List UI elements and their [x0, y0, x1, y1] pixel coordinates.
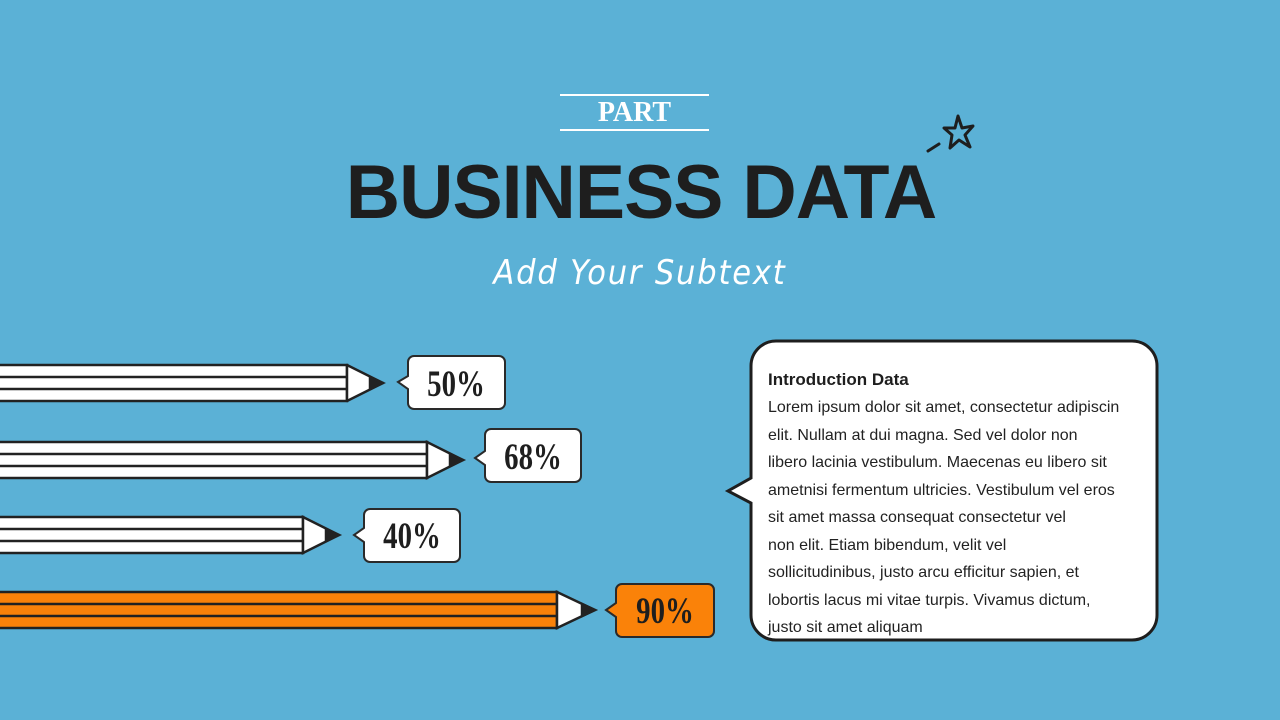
body text: justo sit amet aliquam [768, 619, 923, 636]
pencil 1: 50% [0, 365, 383, 401]
body text [768, 399, 1119, 636]
label: 50%: 50% [427, 364, 485, 405]
label: 90%: 90% [636, 591, 694, 632]
pencil 2: 68% [0, 442, 463, 478]
body text: sit amet massa consequat consectetur vel [768, 509, 1066, 526]
label: 40% [354, 509, 460, 562]
body text: libero lacinia vestibulum. Maecenas eu libero sit [768, 454, 1107, 471]
body text: ametnisi fermentum ultricies. Vestibulum vel eros [768, 482, 1115, 498]
body text: Lorem ipsum dolor sit amet, consectetur adipiscin [768, 399, 1119, 416]
label: 68%: 68% [504, 437, 562, 478]
body text: lobortis lacus mi vitae turpis. Vivamus dictum, [768, 592, 1090, 608]
body text: non elit. Etiam bibendum, velit vel [768, 536, 1006, 554]
body text: elit. Nullam at dui magna. Sed vel dolor non [768, 426, 1078, 444]
label: 50% [398, 356, 505, 409]
label: 40%: 40% [383, 516, 441, 557]
pencil 4: 90% [0, 592, 595, 628]
label: 90% [606, 584, 714, 637]
subtitle: Add Your Subtext [493, 253, 787, 293]
label: 68% [475, 429, 581, 482]
title: BUSINESS DATA [346, 150, 936, 235]
callout: introduction data [725, 340, 1158, 642]
part label: PART [598, 97, 671, 128]
pencil chart [0, 355, 715, 638]
icon: star doodle [926, 114, 974, 153]
pencil 3: 40% [0, 517, 339, 553]
heading: Introduction Data [768, 370, 909, 389]
body text: sollicitudinibus, justo arcu efficitur sapien, et [768, 564, 1079, 581]
